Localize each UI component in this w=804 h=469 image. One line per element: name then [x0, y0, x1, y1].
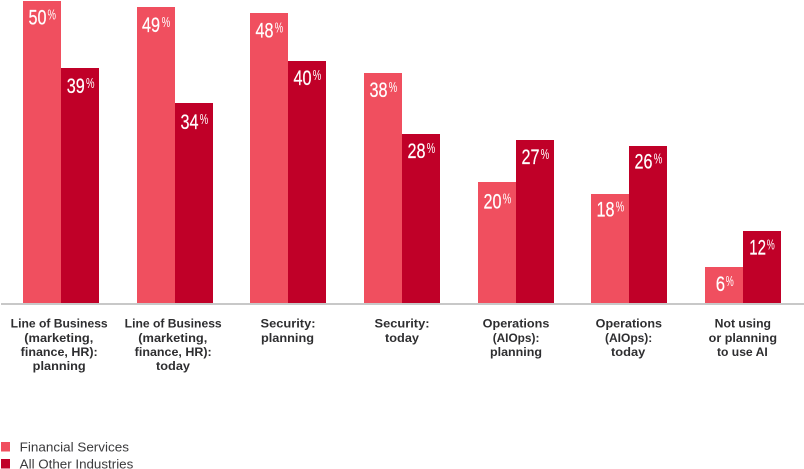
legend item: Financial Services: Financial Services	[20, 440, 129, 454]
group: Security today: %	[389, 79, 397, 96]
legend	[1, 440, 133, 469]
group: Security planning: %	[275, 20, 283, 36]
group: Operations planning	[478, 140, 554, 359]
group: Operations planning: (AIOps):	[493, 331, 539, 345]
group: Security planning: planning	[261, 331, 314, 345]
group: Security today: today	[385, 331, 419, 345]
group: Not using AI: Not using	[715, 317, 771, 331]
group: Security today: %	[427, 140, 435, 157]
group: Line of Business planning	[11, 1, 108, 373]
group: Not using AI	[705, 231, 781, 359]
bar chart	[1, 1, 804, 373]
group: Not using AI: %	[726, 273, 734, 290]
group: Security planning: Security:	[260, 317, 316, 331]
group: Operations planning: 20	[484, 190, 502, 214]
group: Not using AI: 6	[716, 273, 725, 296]
group: Line of Business planning: planning	[33, 359, 86, 373]
group: Line of Business today: 49	[142, 14, 160, 37]
group: Operations today: 18	[596, 198, 614, 222]
group: Security planning	[250, 13, 326, 345]
group: Security planning: 48	[256, 20, 274, 42]
group: Operations today: %	[616, 198, 624, 216]
group: Line of Business planning: 50	[28, 6, 46, 30]
group: Security planning: 40	[294, 67, 312, 90]
group: Operations today: %	[654, 150, 662, 168]
group: Operations planning: 27	[522, 146, 540, 169]
group: Security today	[364, 73, 440, 345]
group: Line of Business today: today	[156, 359, 190, 373]
group: Line of Business planning: Line of Business	[11, 317, 108, 331]
group: Line of Business today: finance, HR):	[135, 345, 212, 359]
group: Operations today: (AIOps):	[605, 331, 652, 345]
group: Line of Business planning: %	[86, 75, 94, 92]
group: Line of Business today: 34	[180, 111, 199, 134]
group: Line of Business planning: finance, HR):	[21, 345, 98, 359]
group: Security today: Security:	[374, 317, 430, 331]
group: Not using AI: %	[767, 236, 775, 254]
group: Operations planning: %	[503, 190, 511, 208]
group: Not using AI: or planning	[709, 331, 777, 345]
group: Line of Business today: (marketing,	[138, 331, 207, 345]
group: Line of Business planning: %	[48, 6, 56, 24]
group: Line of Business today: Line of Business	[125, 317, 222, 331]
group: Line of Business planning: (marketing,	[24, 331, 93, 345]
group: Operations today	[591, 146, 667, 359]
group: Operations today: today	[611, 345, 646, 359]
group: Operations today: 26	[634, 150, 652, 174]
group: Operations today: Operations	[596, 317, 662, 331]
group: Operations planning: %	[541, 146, 549, 163]
group: Not using AI: to use AI	[717, 345, 768, 359]
group: Line of Business today: %	[200, 111, 208, 128]
group: Security today: 28	[408, 140, 426, 163]
group: Security planning: %	[313, 67, 321, 84]
group: Not using AI: 12	[749, 236, 766, 260]
group: Security today: 38	[370, 79, 388, 102]
group: Line of Business planning: 39	[67, 75, 85, 98]
group: Line of Business today	[125, 7, 222, 373]
group: Operations planning: planning	[490, 345, 542, 359]
group: Line of Business today: %	[162, 14, 170, 31]
group: Operations planning: Operations	[483, 317, 550, 331]
